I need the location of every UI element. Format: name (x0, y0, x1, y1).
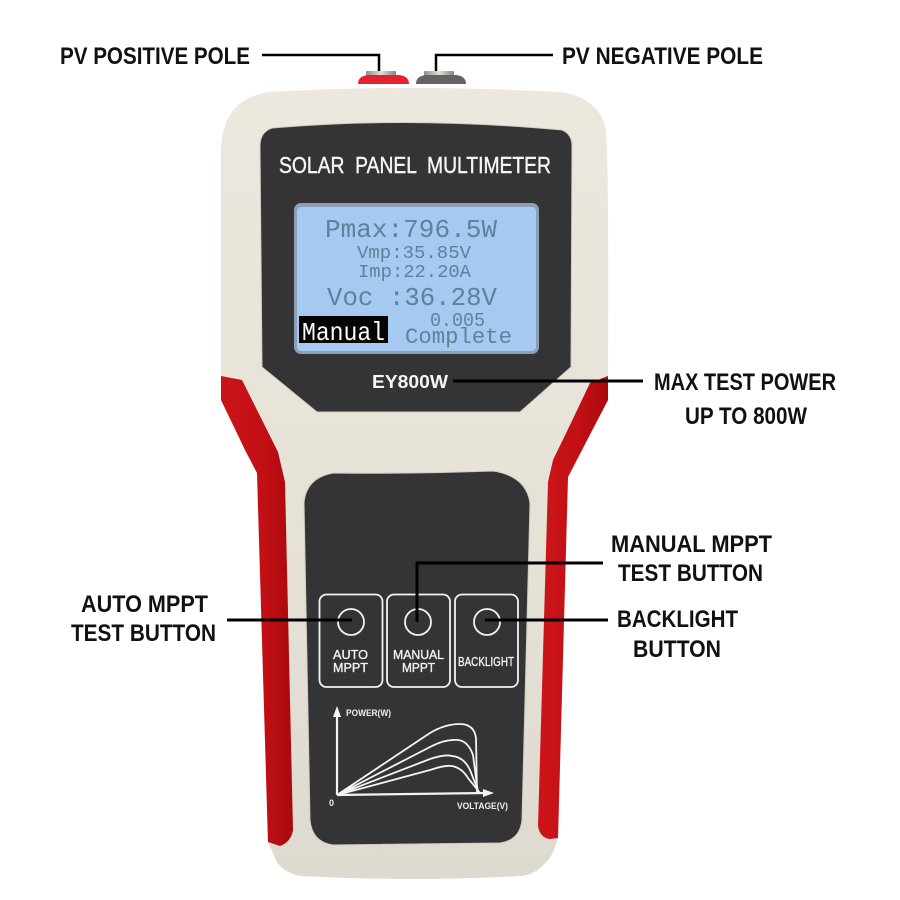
label: PV negative pole (436, 43, 763, 71)
manual MPPT button (387, 594, 450, 687)
label: PV negative pole: PV NEGATIVE POLE (562, 43, 763, 70)
label: auto MPPT test button: AUTO MPPT (81, 591, 208, 618)
LCD Vmp reading: Vmp:35.85V (357, 244, 471, 264)
label: PV positive pole (60, 43, 379, 71)
power voltage chart: VOLTAGE(V) (457, 801, 508, 812)
manual MPPT button: MANUAL (393, 647, 444, 662)
auto MPPT button (320, 594, 382, 687)
label: manual MPPT test button: MANUAL MPPT (611, 531, 772, 558)
Manual mode badge: Manual (302, 318, 385, 348)
LCD value 0.005: 0.005 (430, 310, 485, 332)
power voltage chart (329, 706, 508, 812)
device body (221, 88, 608, 879)
LCD Pmax reading: Pmax:796.5W (325, 215, 497, 245)
LCD Voc reading: Voc :36.28V (327, 283, 497, 313)
backlight button: BACKLIGHT (458, 654, 514, 669)
label: PV positive pole: PV POSITIVE POLE (60, 43, 250, 70)
power voltage chart: POWER(W) (346, 708, 391, 719)
LCD status Complete: Complete (405, 325, 512, 350)
label: max test power: MAX TEST POWER (654, 369, 836, 396)
label: auto MPPT test button: TEST BUTTON (71, 620, 216, 647)
power voltage chart: 0 (329, 798, 334, 808)
label: backlight button: BUTTON (633, 636, 721, 663)
label: backlight button: BACKLIGHT (617, 606, 738, 633)
display panel (260, 122, 572, 412)
label: backlight button (485, 606, 738, 663)
device title: SOLAR PANEL MULTIMETER (279, 152, 551, 178)
label: manual MPPT test button: TEST BUTTON (618, 560, 763, 587)
device (221, 71, 608, 879)
LCD screen (294, 203, 539, 354)
label: manual MPPT test button (417, 531, 772, 622)
negative terminal (416, 71, 466, 84)
label: max test power (453, 369, 836, 430)
manual MPPT button: MPPT (402, 660, 435, 675)
label: max test power: UP TO 800W (685, 403, 808, 430)
control panel (304, 471, 530, 845)
model name: EY800W (372, 371, 449, 392)
right red grip (538, 376, 608, 839)
LCD Imp reading: Imp:22.20A (358, 263, 471, 283)
auto MPPT button: MPPT (333, 660, 368, 675)
left red grip (221, 376, 293, 846)
auto MPPT button: AUTO (333, 647, 368, 662)
label: auto MPPT test button (71, 591, 352, 647)
positive terminal (358, 71, 409, 84)
backlight button (455, 594, 518, 687)
